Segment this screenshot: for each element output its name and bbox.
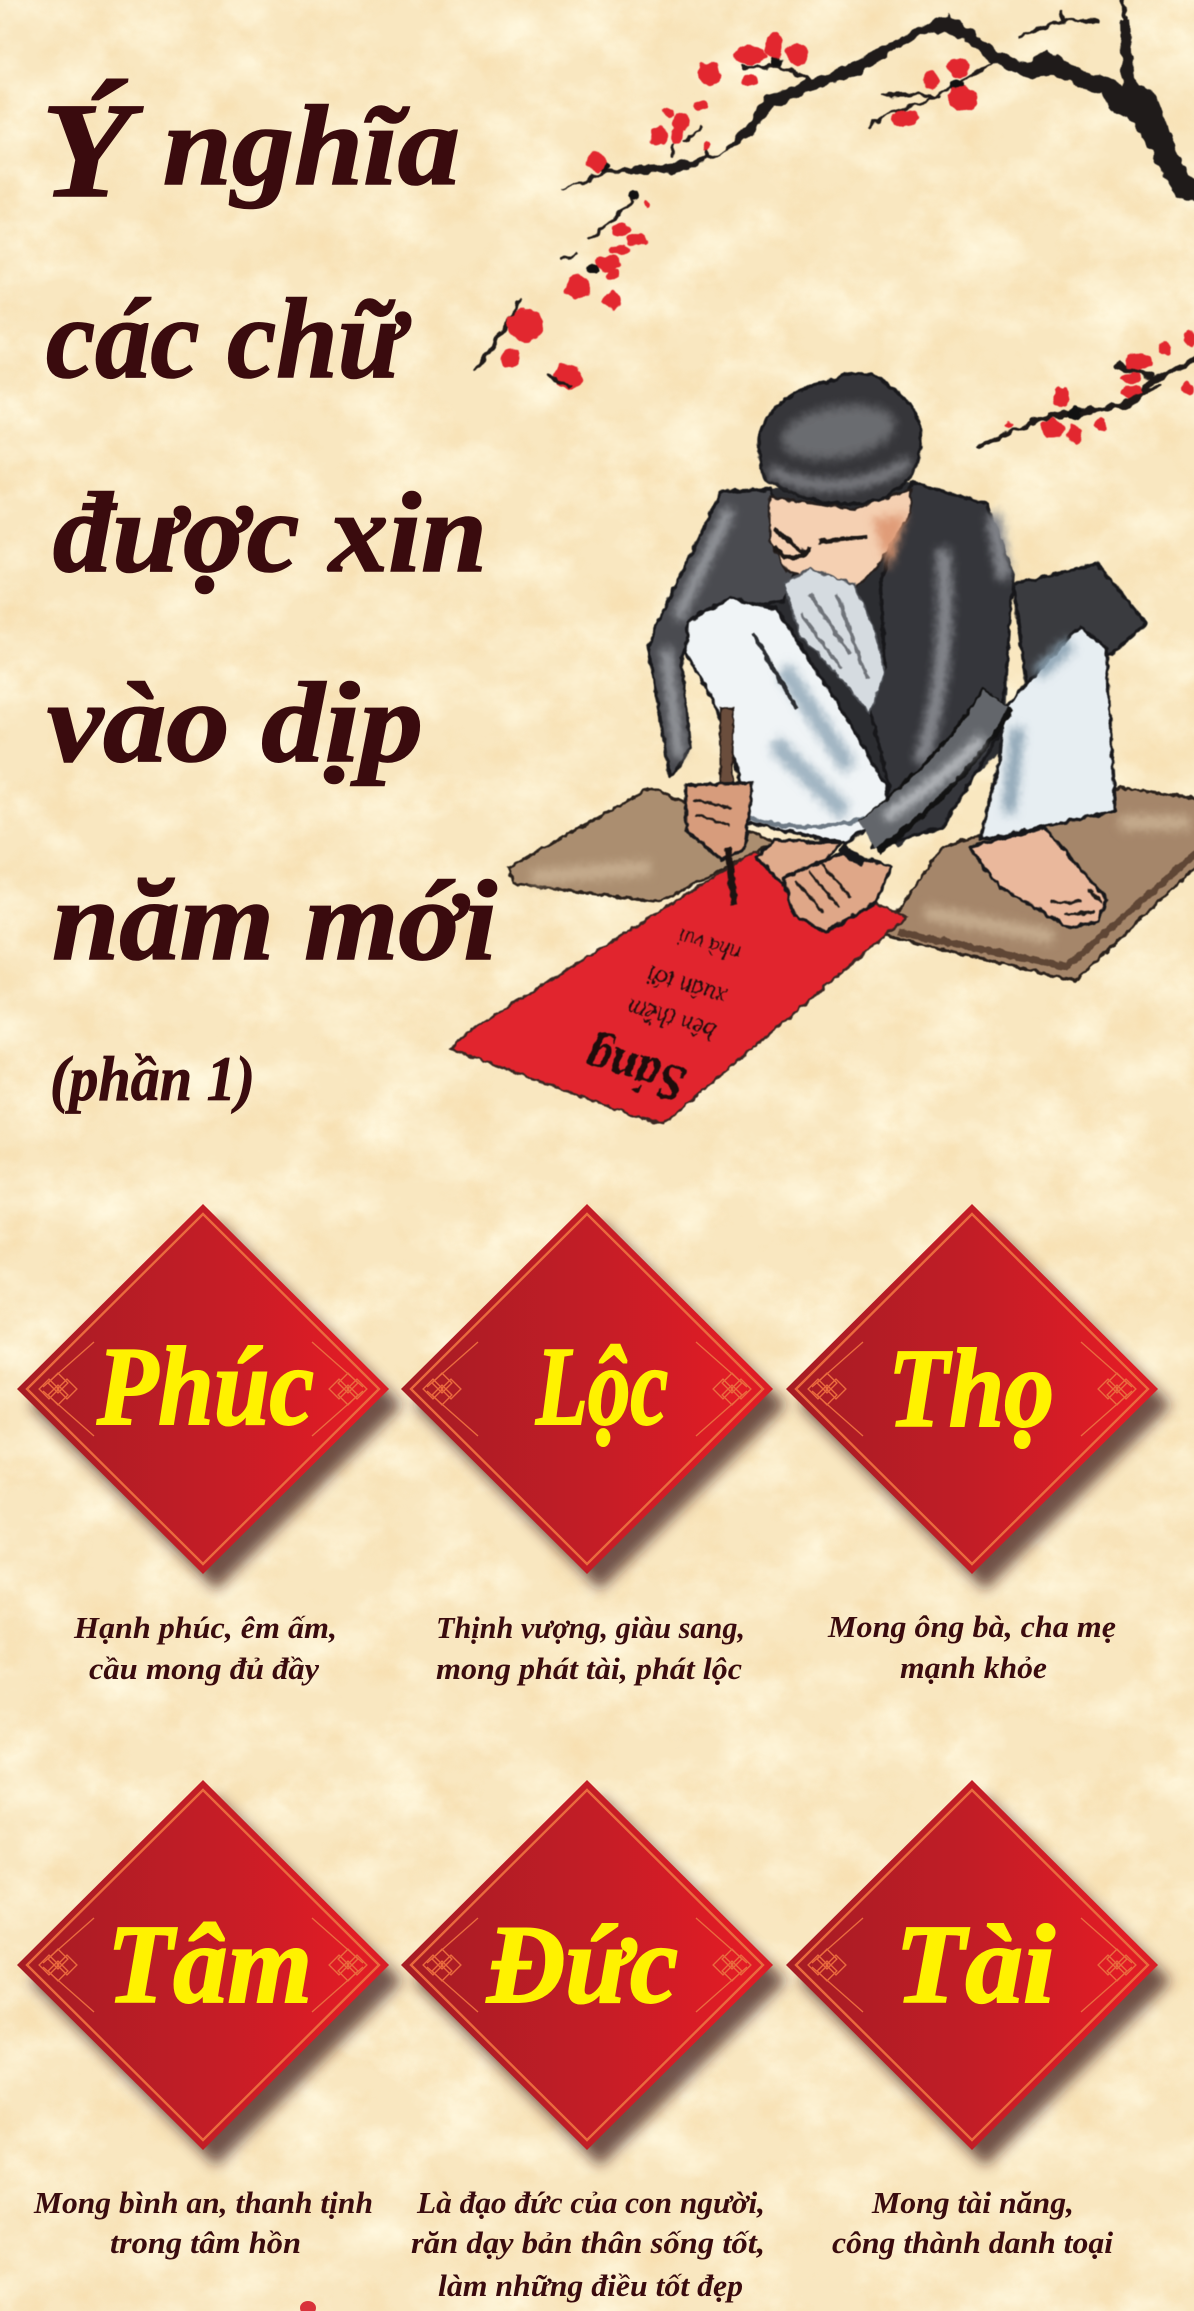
diamond: Tâm: Tâm	[107, 1903, 312, 2027]
writing hand and brush	[686, 708, 752, 905]
diamond: Lộc	[401, 1204, 786, 1590]
feet	[757, 828, 1107, 927]
title	[41, 76, 497, 1114]
caption: Đức: răn dạy bản thân sống tốt,	[411, 2225, 765, 2260]
caption: Đức: làm những điều tốt đẹp	[438, 2268, 743, 2303]
straw mat	[509, 788, 1194, 981]
robe backing	[721, 482, 1013, 848]
caption: Phúc	[73, 1610, 337, 1686]
red scroll	[451, 851, 907, 1124]
caption: Tài	[832, 2185, 1113, 2260]
diamond: Tâm	[17, 1780, 402, 2166]
caption: Thọ: Mong ông bà, cha mẹ	[827, 1609, 1116, 1644]
caption: Đức	[411, 2185, 765, 2303]
title: vào dịp	[47, 659, 423, 786]
caption: Thọ: mạnh khỏe	[900, 1650, 1047, 1685]
caption: Lộc: Thịnh vượng, giàu sang,	[436, 1610, 745, 1645]
right hand	[783, 848, 892, 932]
caption: Tâm: Mong bình an, thanh tịnh	[33, 2185, 373, 2220]
title: Ý	[41, 76, 144, 226]
diamond: Thọ: Thọ	[888, 1327, 1054, 1451]
back leg and robe	[1013, 564, 1146, 688]
caption: Lộc: mong phát tài, phát lộc	[436, 1651, 742, 1686]
diamond: Phúc	[17, 1204, 402, 1590]
small blossom at bottom edge	[300, 2301, 316, 2311]
hat	[759, 373, 921, 504]
caption: Tâm	[33, 2185, 373, 2260]
diamond: Lộc: Lộc	[535, 1325, 668, 1449]
title: các chữ	[46, 275, 411, 402]
diamond: Đức	[401, 1780, 786, 2166]
caption: Tâm: trong tâm hồn	[110, 2225, 301, 2260]
title: năm mới	[52, 857, 497, 984]
plum blossom branch, top right	[476, 0, 1194, 447]
illustration: calligrapher on mat	[451, 373, 1194, 1124]
diamond: Tài	[786, 1780, 1171, 2166]
lower twigs and blossoms	[476, 300, 1160, 447]
beard	[783, 569, 885, 713]
left sleeve	[648, 489, 796, 778]
red scroll: nhà vui	[675, 924, 742, 967]
red scroll: xuân tới	[644, 959, 730, 1013]
title: được xin	[53, 469, 487, 596]
caption: Thọ	[827, 1609, 1116, 1685]
front sleeve	[869, 698, 998, 838]
caption: Tài: công thành danh toại	[832, 2225, 1113, 2260]
caption: Phúc: Hạnh phúc, êm ấm,	[73, 1610, 337, 1645]
caption: Phúc: cầu mong đủ đầy	[89, 1651, 319, 1686]
left trouser leg	[686, 598, 892, 844]
caption: Đức: Là đạo đức của con người,	[416, 2185, 765, 2220]
red scroll: Sáng	[580, 1028, 691, 1115]
red scroll: bên thềm	[624, 992, 718, 1048]
face	[770, 489, 912, 589]
torso robe	[867, 482, 1013, 848]
diamond: Thọ	[786, 1204, 1171, 1590]
diamond: Đức: Đức	[486, 1903, 678, 2027]
caption: Tài: Mong tài năng,	[871, 2185, 1074, 2220]
right trouser leg	[980, 626, 1115, 840]
diamond: Phúc: Phúc	[96, 1325, 314, 1449]
caption: Lộc	[436, 1610, 745, 1686]
diamond: Tài: Tài	[895, 1903, 1055, 2027]
subtitle: (phần 1)	[50, 1043, 255, 1114]
title: nghĩa	[132, 82, 460, 209]
